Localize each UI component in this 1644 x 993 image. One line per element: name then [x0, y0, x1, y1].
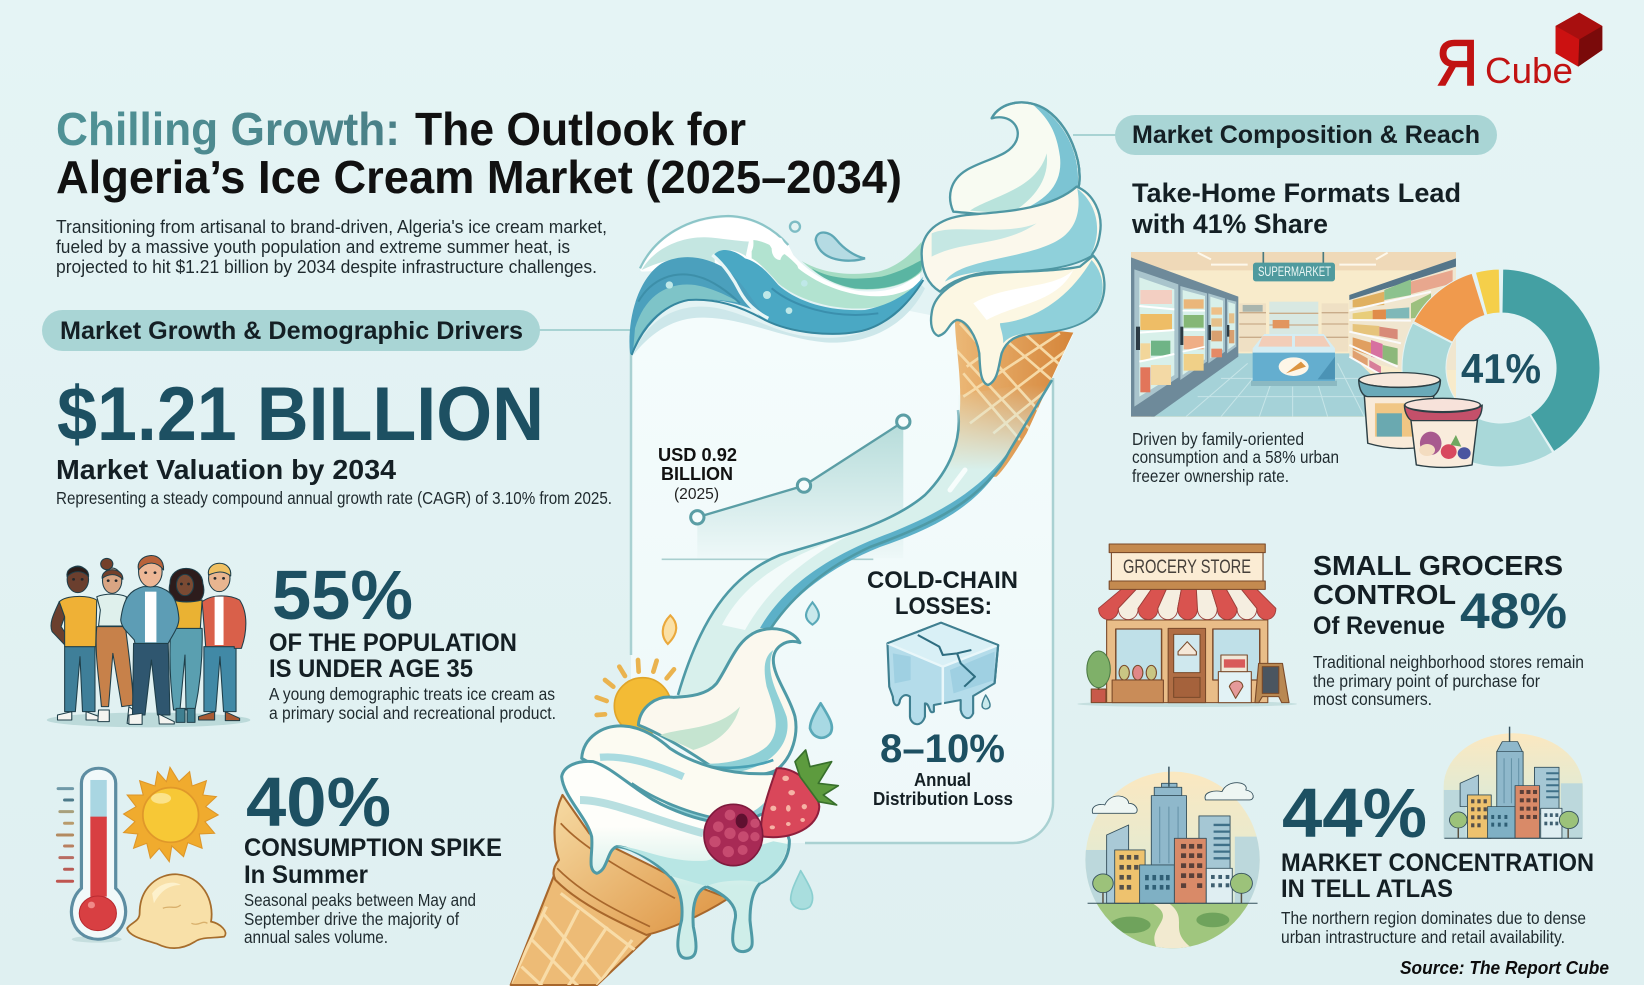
- cone collar: [553, 795, 729, 935]
- person 1: [65, 647, 95, 712]
- blue body: [714, 250, 923, 334]
- icon: melting ice cream scoop: [127, 874, 226, 948]
- stat: 40 percent: annual sales volume.: [244, 927, 388, 947]
- icon: grocery store: [1077, 544, 1297, 707]
- freezer chest: [1251, 381, 1337, 386]
- icon: orange spark: [663, 615, 676, 644]
- cold-chain stat: Distribution Loss: [873, 789, 1013, 809]
- right shelves: [1349, 266, 1456, 358]
- icon: sun: [124, 767, 218, 862]
- stat: small grocers 48 percent: CONTROL: [1313, 579, 1456, 610]
- left freezers: [1131, 257, 1238, 417]
- stat: 55 percent: a primary social and recreational product.: [269, 703, 556, 723]
- icon: group of young people: [47, 556, 250, 727]
- intro text: Transitioning from artisanal to brand-driven, Algeria's ice cream market,: [56, 216, 607, 237]
- heading: take-home formats: [1131, 178, 1461, 239]
- icon: sun behind bottom swirl: [597, 660, 674, 734]
- person 3: [132, 643, 170, 715]
- stat: small grocers 48 percent: most consumers.: [1313, 689, 1432, 709]
- person 4: [170, 628, 202, 710]
- logo: [1436, 13, 1602, 99]
- stat: 55 percent: OF THE POPULATION: [269, 629, 517, 657]
- title: The Outlook for: [415, 103, 746, 155]
- take-home caption: freezer ownership rate.: [1132, 466, 1289, 486]
- title: [56, 103, 902, 203]
- chart label: (2025): [674, 486, 719, 503]
- icon: skyline: [1444, 727, 1583, 838]
- stat: 55 percent: 55%: [272, 556, 413, 634]
- raspberry: [704, 804, 763, 866]
- headline stat: 1.21 billion: $1.21 BILLION: [57, 372, 544, 457]
- icon: bottom ice cream cone: [511, 602, 838, 987]
- intro text: projected to hit $1.21 billion by 2034 despite infrastructure challenges.: [56, 256, 597, 277]
- icon: thermometer: [57, 768, 126, 943]
- take-home caption: Driven by family-oriented: [1132, 429, 1304, 449]
- swirl tier three with drips: [562, 761, 789, 958]
- mint band: [752, 240, 915, 309]
- splash droplets: [790, 222, 800, 232]
- stat: 40 percent: In Summer: [244, 861, 368, 889]
- line chart: [662, 415, 910, 559]
- section pill: market growth: [42, 310, 632, 351]
- awning: [1099, 589, 1276, 620]
- heading: take-home formats: with 41% Share: [1131, 209, 1328, 239]
- person 5: [204, 647, 236, 712]
- stat: 44 percent: 44%: [1282, 774, 1427, 852]
- stat: small grocers 48 percent: Traditional neighborhood stores remain: [1313, 652, 1584, 672]
- ice cream stream: [678, 320, 1073, 730]
- headline stat: 1.21 billion: [56, 372, 612, 508]
- cold-chain stat: [873, 727, 1013, 809]
- upper cone: [950, 321, 1074, 477]
- back shelves: [1239, 303, 1266, 352]
- icon: top soft-serve swirl: [922, 102, 1104, 385]
- stat: 40 percent: 40%: [246, 763, 391, 841]
- cold-chain stat: 8–10%: [880, 727, 1005, 771]
- stat: small grocers 48 percent: the primary point of purchase for: [1313, 671, 1540, 691]
- stat: 40 percent: September drive the majority of: [244, 909, 459, 929]
- intro text: [56, 216, 607, 277]
- stat: 55 percent: A young demographic treats ice cream as: [269, 684, 555, 704]
- swirl tier two: [582, 726, 776, 822]
- floor: [1151, 353, 1370, 417]
- person 2: [96, 627, 134, 707]
- take-home caption: consumption and a 58% urban: [1132, 447, 1339, 467]
- connector: market composition: [1073, 134, 1116, 136]
- take-home caption: [1132, 429, 1339, 486]
- droplets: [810, 703, 832, 738]
- cold-chain losses text: LOSSES:: [895, 593, 992, 620]
- icon: ice cream tubs: [1359, 373, 1482, 467]
- illustration: supermarket aisle: [1131, 252, 1456, 417]
- stat: small grocers 48 percent: Of Revenue: [1313, 612, 1445, 640]
- waffle cone: [511, 877, 650, 985]
- stat: 44 percent: urban intrastructure and retail availability.: [1281, 927, 1565, 947]
- stat: small grocers 48 percent: 48%: [1460, 583, 1567, 639]
- logo: Я: [1436, 26, 1478, 99]
- stat: 44 percent: The northern region dominates due to dense: [1281, 908, 1586, 928]
- stat: 44 percent: [1281, 774, 1594, 947]
- section pill: market composition: Market Composition & Reach: [1132, 121, 1480, 149]
- donut chart: [1402, 269, 1600, 467]
- center panel: [631, 310, 1073, 843]
- heading: take-home formats: Take-Home Formats Lead: [1132, 178, 1461, 208]
- headline stat: 1.21 billion: Market Valuation by 2034: [56, 454, 397, 485]
- chart label: [658, 445, 737, 503]
- strawberry: [761, 768, 819, 837]
- stat: 44 percent: IN TELL ATLAS: [1281, 875, 1453, 903]
- panel border: [631, 345, 1053, 843]
- icon: grocery store: GROCERY STORE: [1123, 557, 1251, 578]
- title: Algeria’s Ice Cream Market (2025–2034): [56, 151, 902, 203]
- swirl tier one: [638, 629, 800, 775]
- stat: small grocers 48 percent: [1313, 550, 1584, 709]
- chart label: USD 0.92: [658, 445, 737, 465]
- stat: small grocers 48 percent: SMALL GROCERS: [1313, 550, 1563, 581]
- icon: melting ice cube: [887, 623, 998, 724]
- illustration: supermarket aisle: SUPERMARKET: [1258, 264, 1331, 279]
- stat: 44 percent: MARKET CONCENTRATION: [1281, 849, 1594, 877]
- icon: city circle: [1081, 767, 1264, 950]
- cold-chain stat: Annual: [914, 770, 971, 790]
- section pill: market composition: [1115, 115, 1497, 155]
- stat: 40 percent: CONSUMPTION SPIKE: [244, 834, 502, 862]
- cold-chain losses text: [867, 567, 1018, 620]
- hanging sign: [1263, 252, 1323, 263]
- logo: Cube: [1485, 50, 1573, 91]
- intro text: fueled by a massive youth population and extreme summer heat, is: [56, 236, 570, 257]
- donut value: 41%: [1461, 345, 1541, 392]
- stat: 40 percent: Seasonal peaks between May and: [244, 890, 476, 910]
- foam: [640, 218, 798, 272]
- chart label: BILLION: [661, 464, 733, 484]
- headline stat: 1.21 billion: Representing a steady compound annual growth rate (CAGR) of 3.10% from 2025.: [56, 488, 612, 508]
- stat: 55 percent: [269, 556, 556, 723]
- wave splash: [629, 216, 925, 355]
- stat: 40 percent: [244, 763, 502, 947]
- source note: Source: The Report Cube: [1400, 958, 1609, 978]
- cold-chain losses text: COLD-CHAIN: [867, 567, 1018, 594]
- section pill: market growth: Market Growth & Demographic Drivers: [60, 317, 523, 345]
- stream body: [678, 380, 1052, 730]
- title: Chilling Growth:: [56, 103, 400, 155]
- streamer: [802, 242, 922, 290]
- stat: 55 percent: IS UNDER AGE 35: [269, 655, 473, 683]
